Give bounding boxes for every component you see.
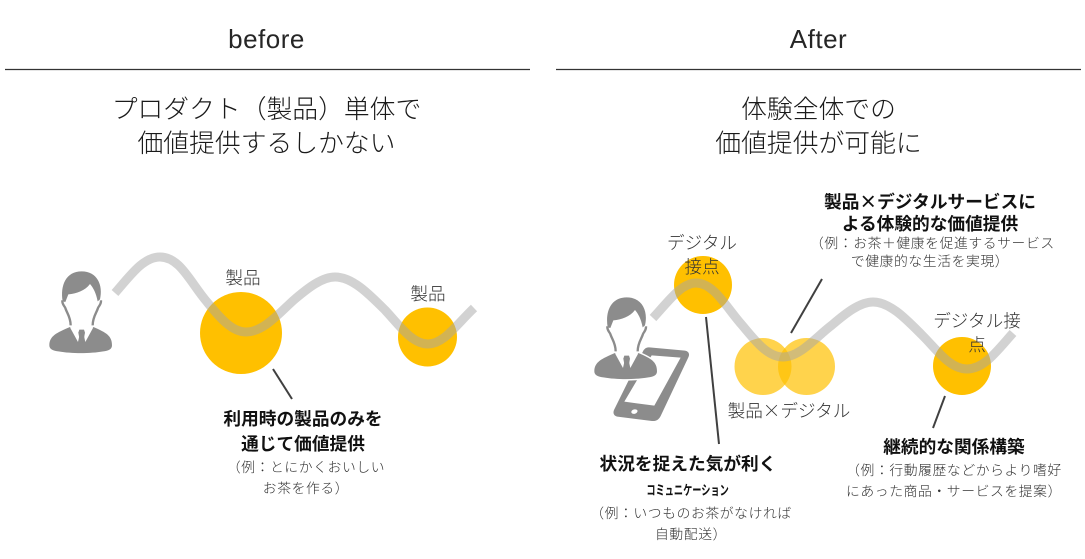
heading: after: After	[790, 24, 847, 54]
wave: before journey	[115, 257, 474, 344]
callout example: 自動配送）	[655, 523, 727, 543]
callout title	[223, 405, 383, 456]
callout title: 継続的な関係構築	[883, 433, 1025, 459]
callout title: コミュニケーション	[647, 479, 729, 499]
label: digital touchpoint 1	[667, 230, 737, 278]
wave: after journey	[653, 283, 1013, 369]
callout title: 利用時の製品のみを	[223, 405, 383, 431]
circle: digital overlap	[778, 338, 835, 395]
circle: digital touchpoint 1	[674, 256, 732, 314]
leader line: digital touchpoint	[706, 317, 719, 444]
divider: after	[556, 68, 1081, 70]
callout example	[846, 459, 1062, 500]
divider: before	[5, 68, 530, 70]
leader line: overlap	[791, 279, 822, 333]
leader line: relationship	[933, 396, 945, 428]
icon: person after	[594, 297, 657, 379]
callout example: （例：いつものお茶がなければ	[590, 502, 792, 522]
subheading: after: 体験全体での	[741, 89, 896, 126]
label: digital touchpoint 2: 点	[968, 332, 986, 356]
subheading: after	[715, 89, 922, 160]
circle: digital touchpoint 2	[933, 337, 991, 395]
callout example	[227, 456, 385, 497]
callout example	[810, 232, 1055, 270]
callout example: で健康的な生活を実現）	[851, 250, 1009, 270]
label: digital touchpoint 1: デジタル	[667, 230, 737, 255]
label: product large: 製品	[225, 265, 261, 290]
callout title: よる体験的な価値提供	[842, 210, 1018, 236]
heading: before: before	[228, 24, 305, 54]
callout title	[824, 188, 1036, 236]
callout example: にあった商品・サービスを提案）	[846, 480, 1062, 500]
callout title: 状況を捉えた気が利く	[600, 450, 776, 476]
callout title	[600, 450, 776, 499]
callout example: お茶を作る）	[263, 477, 349, 497]
circle: product large	[200, 292, 282, 374]
subheading: before: プロダクト（製品）単体で	[112, 89, 421, 126]
callout: relationship	[846, 433, 1062, 500]
circle: product small	[398, 308, 457, 366]
callout example: （例：とにかくおいしい	[227, 456, 385, 476]
subheading: before: 価値提供するしかない	[138, 123, 395, 160]
label: digital touchpoint 1: 接点	[684, 254, 720, 278]
callout: before	[223, 405, 385, 497]
callout: communication	[590, 450, 792, 543]
label: product small: 製品	[410, 281, 446, 306]
label: digital touchpoint 2	[933, 308, 1021, 356]
icon: smartphone	[613, 347, 689, 421]
leader line: before	[273, 369, 292, 399]
callout example	[590, 502, 792, 543]
callout title: 製品×デジタルサービスに	[824, 188, 1036, 214]
label: digital touchpoint 2: デジタル接	[933, 308, 1021, 333]
callout example: （例：お茶＋健康を促進するサービス	[810, 232, 1055, 252]
subheading: after: 価値提供が可能に	[715, 123, 922, 160]
callout: overlap	[810, 188, 1055, 270]
circle: product overlap	[734, 338, 792, 395]
subheading: before	[112, 89, 421, 160]
callout title: 通じて価値提供	[241, 430, 365, 456]
icon: person before	[49, 271, 112, 353]
label: product x digital: 製品×デジタル	[728, 398, 850, 423]
callout example: （例：行動履歴などからより嗜好	[846, 459, 1062, 479]
